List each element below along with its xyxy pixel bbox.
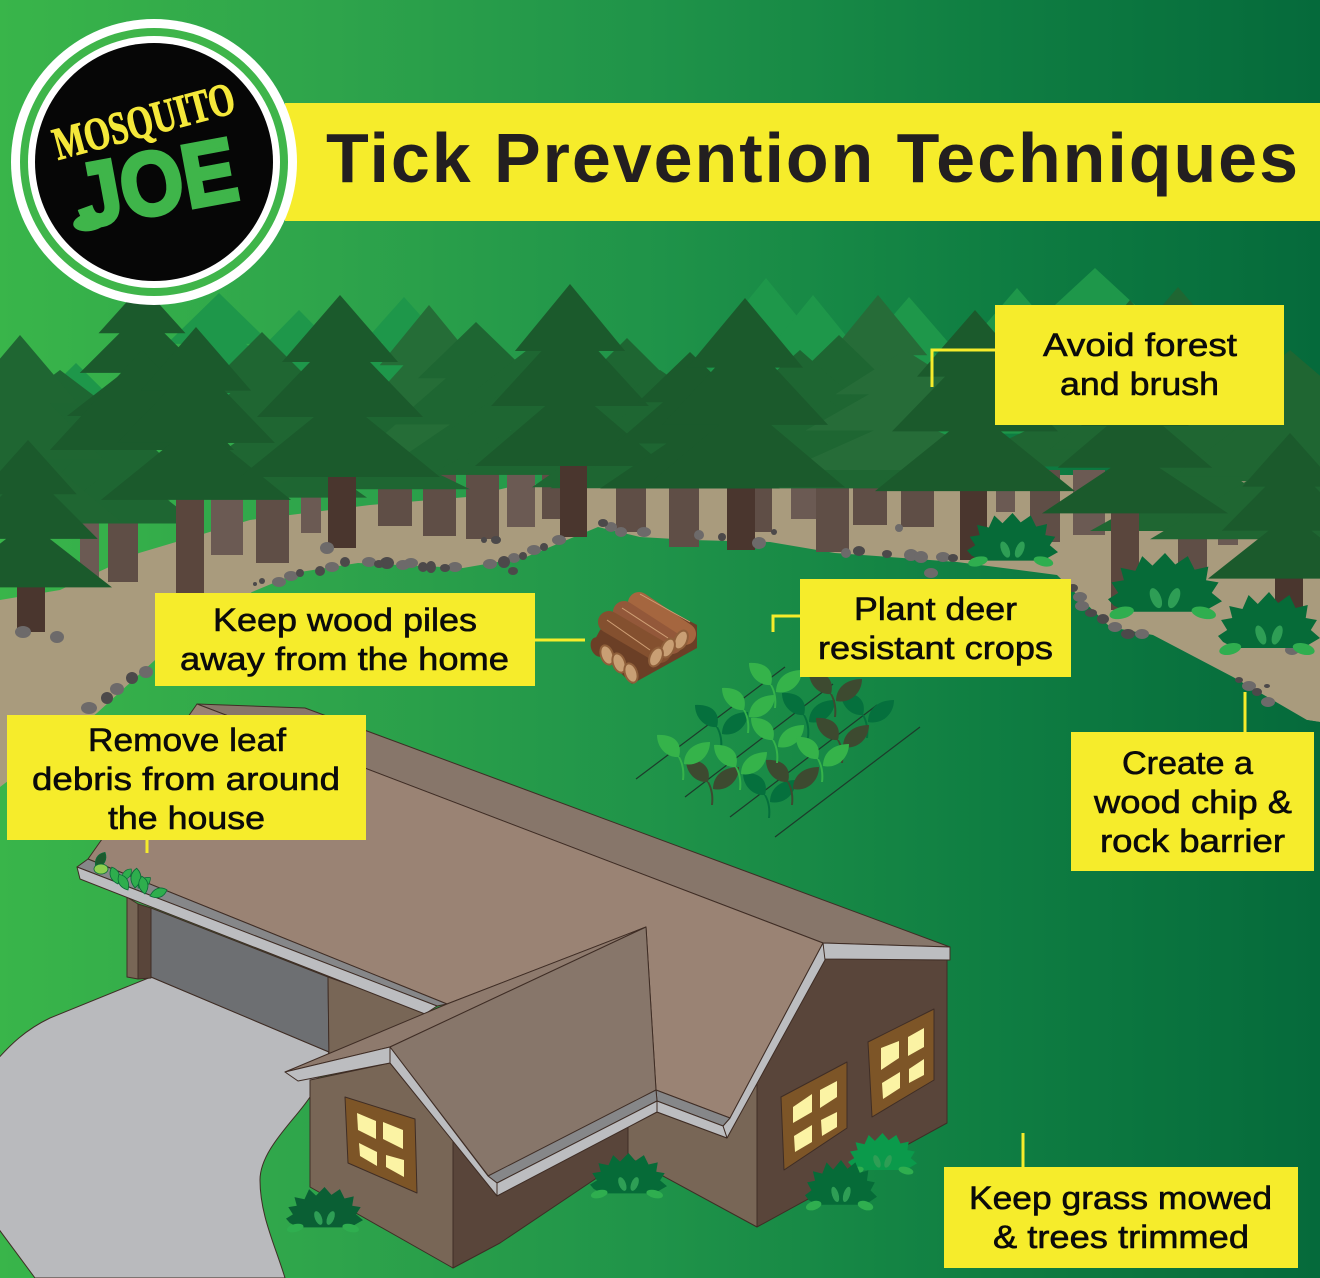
garage side wall: [328, 977, 450, 1060]
callout: grass and trees: & trees trimmed: [993, 1219, 1249, 1255]
logo J hook: [72, 210, 108, 234]
callout: deer resistant crops: [800, 579, 1071, 677]
callout: wood piles: Keep wood piles: [213, 602, 477, 638]
background light trees: [6, 268, 1320, 472]
gable roof sliver: [285, 927, 646, 1072]
crop rows: [636, 663, 920, 837]
title: Tick Prevention Techniques: [326, 119, 1298, 197]
callout: grass and trees: Keep grass mowed: [969, 1180, 1272, 1216]
callout: deer resistant crops: Plant deer: [854, 591, 1017, 627]
logo word Mosquito: MOSQUITO: [47, 72, 240, 170]
callout: wood piles: [155, 593, 535, 686]
right wall: [757, 958, 947, 1227]
front dark trees: [0, 284, 1320, 587]
front gable wall: [310, 1063, 453, 1268]
garage door: [151, 908, 329, 1052]
recessed wall: [628, 1083, 757, 1227]
dirt path and wood chip barrier: [0, 475, 1320, 800]
callout: leaf debris: the house: [108, 800, 265, 836]
callout: wood piles: away from the home: [180, 641, 509, 677]
gable roof: [390, 927, 656, 1178]
log pile: [588, 594, 697, 684]
mid tree layer: [0, 287, 1320, 539]
side wall: [453, 1127, 628, 1268]
logo word Joe: JOE: [67, 120, 245, 248]
gutter leaf debris: [92, 850, 168, 900]
driveway: [0, 977, 329, 1278]
logo: [11, 19, 297, 305]
title banner: [285, 103, 1320, 221]
callout: avoid forest: and brush: [1060, 366, 1219, 402]
rock barrier: [15, 522, 1299, 714]
callout: wood chip barrier: [1071, 732, 1314, 871]
lawn: [0, 527, 1320, 1278]
back roof plane: [197, 704, 950, 947]
lower shrubs: [286, 1133, 917, 1234]
callout: wood chip barrier: rock barrier: [1100, 823, 1285, 859]
upper shrubs: [967, 513, 1320, 657]
house: [77, 704, 950, 1268]
connector lines: [147, 350, 1245, 1167]
callout: wood chip barrier: Create a: [1122, 745, 1253, 781]
back tree trunks: [80, 470, 1238, 582]
callout: grass and trees: [944, 1167, 1298, 1268]
callout: wood chip barrier: wood chip &: [1093, 784, 1292, 820]
main roof plane: [88, 704, 823, 1118]
callout: avoid forest: [995, 305, 1284, 425]
callout: leaf debris: Remove leaf: [88, 722, 286, 758]
window: right wall far: [868, 1009, 934, 1117]
front tree trunks: [17, 460, 1303, 632]
callout: avoid forest: Avoid forest: [1043, 327, 1237, 363]
window: right wall near: [781, 1062, 847, 1170]
callout: leaf debris: debris from around: [32, 761, 340, 797]
garage posts: [127, 897, 151, 979]
gutter with fascia: [77, 859, 447, 1014]
roof trim: [285, 943, 950, 1196]
callout: leaf debris: [7, 715, 366, 840]
window: front gable: [345, 1097, 417, 1193]
dark rocks: [101, 519, 1270, 704]
callout: deer resistant crops: resistant crops: [818, 630, 1053, 666]
